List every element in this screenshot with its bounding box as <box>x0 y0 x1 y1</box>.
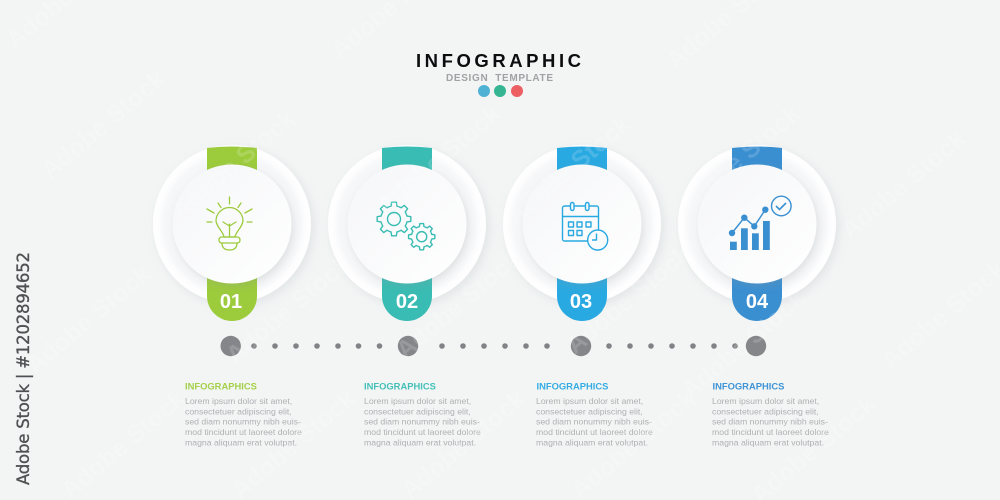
step 3 badge <box>503 145 661 321</box>
text block 3 <box>536 380 653 447</box>
watermark: Adobe Stock <box>21 260 156 380</box>
text block 2 <box>364 380 481 447</box>
text block 1: magna aliquam erat volutpat. <box>185 437 297 447</box>
text block 2: INFOGRAPHICS <box>364 380 436 392</box>
subtitle: DESIGN TEMPLATE <box>446 73 553 84</box>
watermark: Adobe Stock <box>371 100 506 220</box>
text block 1: Lorem ipsum dolor sit amet, <box>185 396 292 406</box>
step 1 badge <box>153 145 311 321</box>
text block 1: consectetuer adipiscing elit, <box>185 406 292 416</box>
icon: gears <box>377 202 435 250</box>
number 04: 04 <box>746 291 769 313</box>
icon: light bulb <box>207 197 252 250</box>
title: INFOGRAPHIC <box>416 50 581 71</box>
text block 2: Lorem ipsum dolor sit amet, <box>364 396 471 406</box>
text block 3: INFOGRAPHICS <box>536 380 608 392</box>
watermark: Adobe Stock <box>671 100 806 220</box>
watermark: Adobe Stock <box>36 65 171 185</box>
text block 4: consectetuer adipiscing elit, <box>712 406 819 416</box>
icon: growth chart with check <box>729 196 791 250</box>
text block 4: mod tincidunt ut laoreet dolore <box>712 427 829 437</box>
watermark: Adobe Stock <box>166 105 301 225</box>
text block 4: magna aliquam erat volutpat. <box>712 437 824 447</box>
text block 2: sed diam nonummy nibh euis- <box>364 417 480 427</box>
stock id side label: Adobe Stock | #1202894652 <box>14 252 33 485</box>
number 02: 02 <box>396 291 418 313</box>
text block 4 <box>712 380 829 447</box>
text block 2: consectetuer adipiscing elit, <box>364 406 471 416</box>
watermark: Adobe Stock <box>221 250 356 370</box>
dark blue ribbon <box>732 146 782 321</box>
teal ribbon <box>382 146 432 321</box>
watermark: Adobe Stock <box>836 125 971 245</box>
watermark: Adobe Stock <box>391 245 526 365</box>
blue ribbon <box>557 146 607 321</box>
text block 1: sed diam nonummy nibh euis- <box>185 417 301 427</box>
text block 3: sed diam nonummy nibh euis- <box>536 417 652 427</box>
number 03: 03 <box>570 291 592 313</box>
watermark: Adobe Stock <box>561 240 696 360</box>
text block 1: INFOGRAPHICS <box>185 380 257 392</box>
watermark: Adobe Stock <box>676 285 811 405</box>
icon: calendar with clock <box>562 202 608 250</box>
watermark: Adobe Stock <box>501 110 636 230</box>
text block 3: Lorem ipsum dolor sit amet, <box>536 396 643 406</box>
step 2 badge <box>328 145 486 321</box>
text block 3: mod tincidunt ut laoreet dolore <box>536 427 653 437</box>
text block 1 <box>185 380 302 447</box>
text block 3: magna aliquam erat volutpat. <box>536 437 648 447</box>
title block <box>416 50 581 97</box>
timeline <box>220 336 766 356</box>
text block 4: sed diam nonummy nibh euis- <box>712 417 828 427</box>
number 01: 01 <box>220 291 242 313</box>
text block 4: INFOGRAPHICS <box>712 380 784 392</box>
step 4 badge <box>678 145 836 321</box>
text block 1: mod tincidunt ut laoreet dolore <box>185 427 302 437</box>
text block 2: magna aliquam erat volutpat. <box>364 437 476 447</box>
text block 4: Lorem ipsum dolor sit amet, <box>712 396 819 406</box>
title dots <box>478 85 523 97</box>
green ribbon <box>207 146 257 321</box>
text block 2: mod tincidunt ut laoreet dolore <box>364 427 481 437</box>
text block 3: consectetuer adipiscing elit, <box>536 406 643 416</box>
